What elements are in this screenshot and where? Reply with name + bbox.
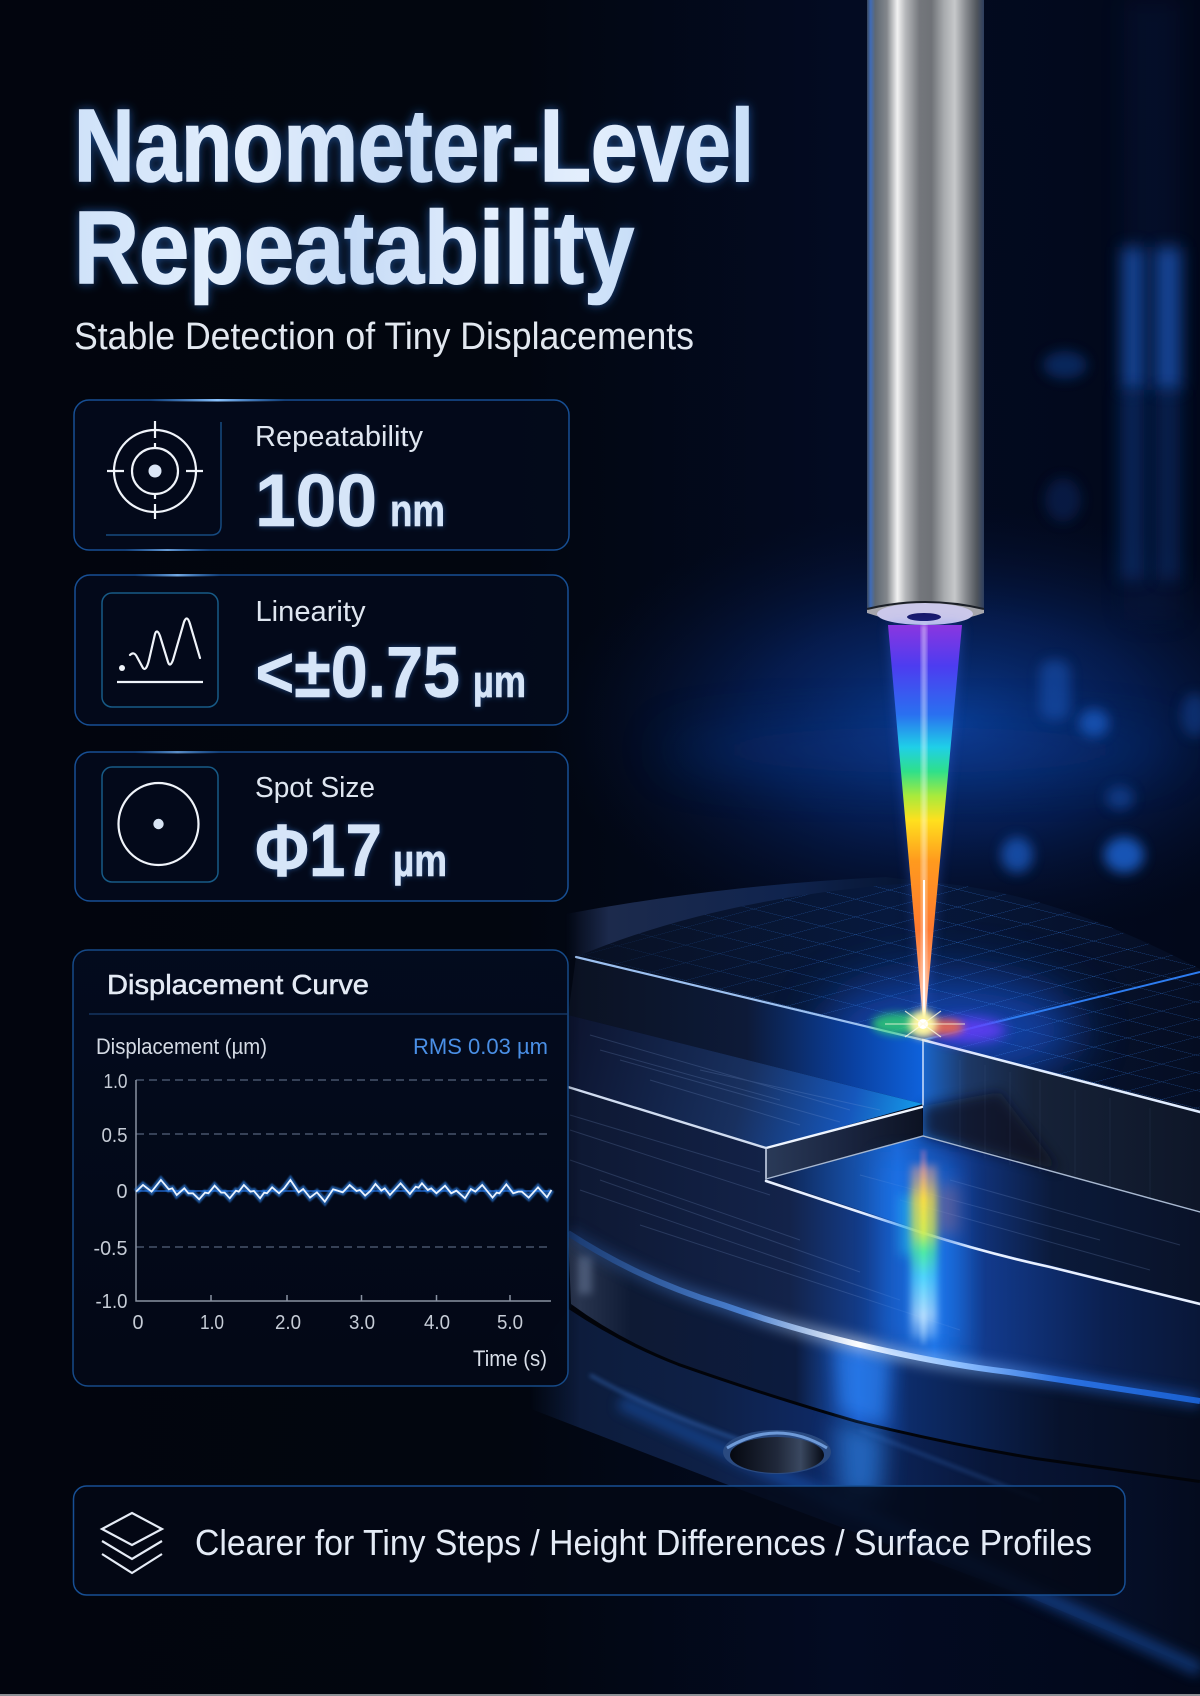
title xyxy=(74,88,754,305)
RMS readout: RMS 0.03 µm xyxy=(413,1034,548,1059)
line chart: 5.0 xyxy=(497,1312,523,1334)
title: Repeatability xyxy=(74,190,634,305)
rim metal highlights xyxy=(578,1256,890,1425)
probe barrel xyxy=(867,0,984,625)
label: repeatability: Repeatability xyxy=(255,421,424,453)
top plate surface with grid xyxy=(578,883,1200,1110)
line chart: -0.5 xyxy=(94,1238,128,1260)
card: repeatability xyxy=(74,399,569,551)
icon: spot circle xyxy=(102,767,218,882)
title: Nanometer-Level xyxy=(74,88,754,203)
panel heading: Displacement Curve xyxy=(107,969,369,1000)
recessed step surface xyxy=(766,1136,1200,1302)
line chart: 1.0 xyxy=(200,1312,224,1334)
value: phi 17 um: Φ17 xyxy=(255,809,382,892)
line chart: 2.0 xyxy=(275,1312,301,1334)
lower mounting plate with hole xyxy=(500,1307,1200,1670)
bottom benefit bar xyxy=(74,1486,1125,1595)
brushed vertical streaks on the step wall xyxy=(960,1060,1150,1200)
x axis title: Time (s) xyxy=(473,1346,547,1371)
value: less than 0.75 um: µm xyxy=(473,656,526,707)
label: linearity: Linearity xyxy=(256,596,366,628)
main lower surface xyxy=(568,1087,1200,1401)
disc rim band xyxy=(568,1233,1200,1480)
icon: signal peaks xyxy=(102,593,218,707)
line chart: 0 xyxy=(132,1312,144,1334)
subtitle: Stable Detection of Tiny Displacements xyxy=(74,316,694,358)
value: phi 17 um: µm xyxy=(393,835,447,886)
y axis title: Displacement (µm) xyxy=(96,1034,267,1059)
rainbow reflection xyxy=(880,1150,960,1345)
blurred background machinery xyxy=(1001,0,1200,1585)
value: 100 nm: nm xyxy=(390,485,445,536)
line chart: 1.0 xyxy=(104,1071,128,1093)
label: spot size: Spot Size xyxy=(255,772,375,804)
line chart: 0.5 xyxy=(102,1125,128,1147)
step front faces xyxy=(568,957,923,1104)
value: 100 nm xyxy=(255,459,445,542)
line chart: -1.0 xyxy=(96,1291,128,1313)
line chart: 0 xyxy=(116,1181,128,1203)
icon: target xyxy=(106,421,221,535)
middle step top xyxy=(568,1015,923,1148)
laser spot starburst xyxy=(872,1010,1006,1043)
stage: stepped metal workpiece xyxy=(500,870,1200,1670)
line chart: 4.0 xyxy=(424,1312,450,1334)
outer rim arc xyxy=(560,877,927,965)
card: spot size xyxy=(75,751,568,901)
highlight edges xyxy=(568,957,1200,1304)
dark gap below disc xyxy=(571,1307,1200,1480)
icon: stacked layers xyxy=(102,1513,162,1573)
line chart xyxy=(94,1071,551,1334)
disc bright arc xyxy=(568,1233,1200,1401)
value: 100 nm: 100 xyxy=(255,459,377,542)
value: less than 0.75 um: <±0.75 xyxy=(256,633,460,713)
line chart: 3.0 xyxy=(349,1312,375,1334)
brushed metal streaks xyxy=(570,1035,1180,1330)
laser beam xyxy=(888,625,962,1032)
card: linearity xyxy=(75,574,568,725)
benefit text: Clearer for Tiny Steps / Height Differences / Surface Profiles xyxy=(195,1522,1092,1563)
panel: displacement curve xyxy=(73,950,568,1386)
